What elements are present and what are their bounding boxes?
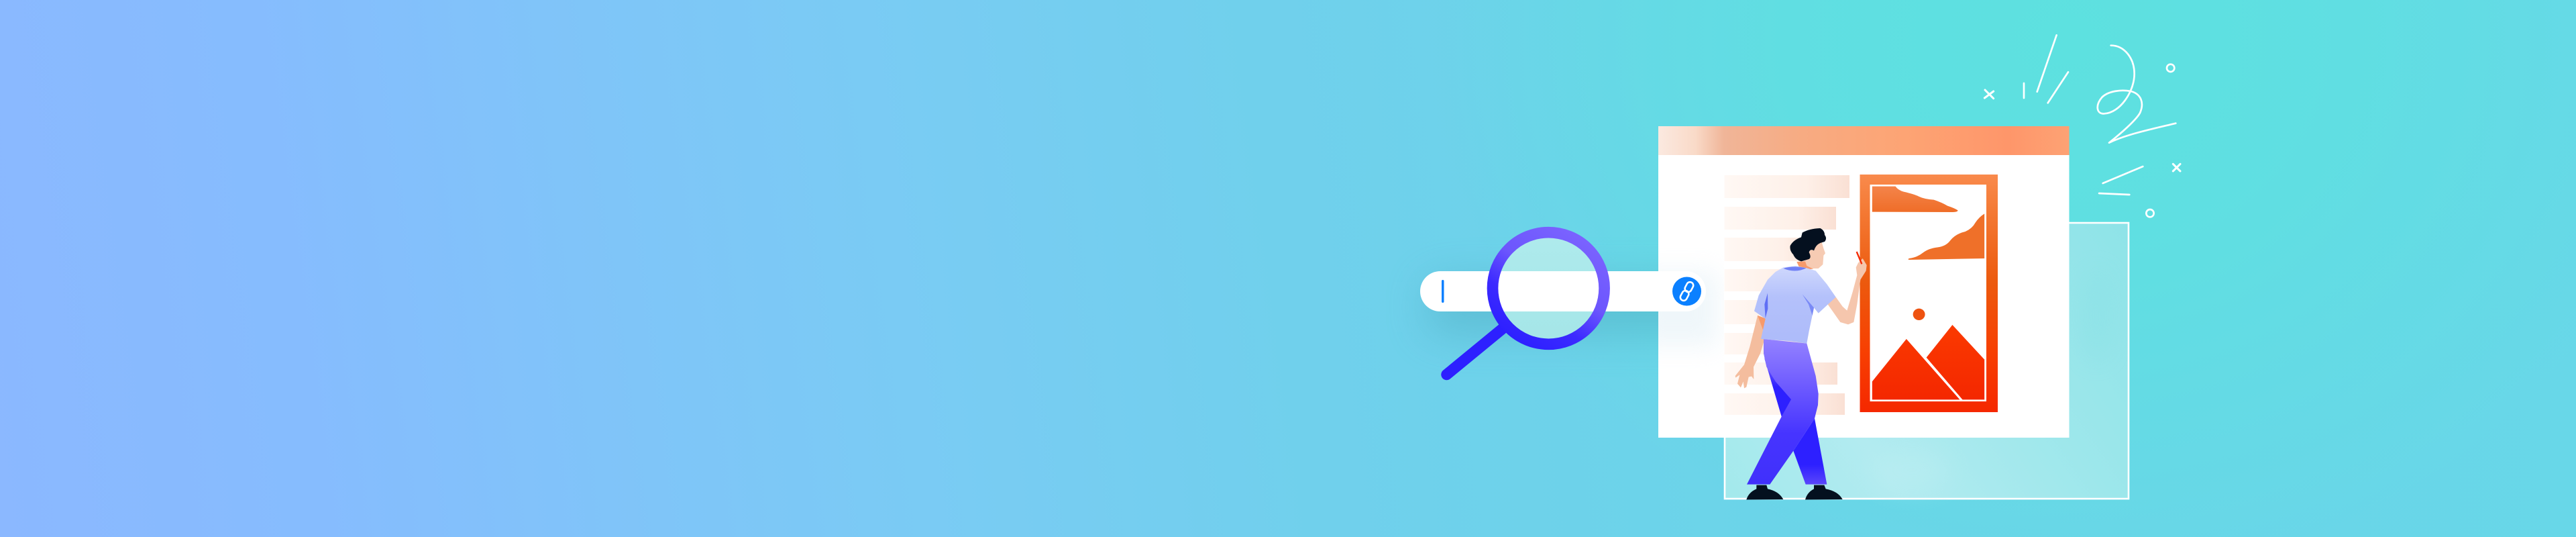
curly scribble xyxy=(2098,46,2176,143)
panel: browser window xyxy=(1658,126,2069,438)
sun xyxy=(1913,309,1925,320)
face xyxy=(1805,242,1825,268)
window body xyxy=(1658,126,2069,438)
back thigh shadow xyxy=(1764,358,1792,418)
decorative sketch marks xyxy=(1984,35,2180,217)
search bar xyxy=(1420,271,1706,311)
raised arm and hand xyxy=(1827,258,1867,324)
front leg and hips xyxy=(1747,339,1819,485)
panel: teal watercolor square behind window xyxy=(1725,223,2129,499)
icon: magnifying glass xyxy=(1446,232,1605,375)
neck xyxy=(1796,260,1813,270)
shirt xyxy=(1754,266,1836,344)
shirt fold: left xyxy=(1764,293,1768,318)
back arm and hand xyxy=(1735,315,1766,388)
mountain: front xyxy=(1872,339,1960,399)
icon: link xyxy=(1672,277,1701,306)
cross marks xyxy=(1984,90,2180,171)
cloud: top xyxy=(1872,187,1958,212)
window header bar xyxy=(1658,126,2069,155)
magnifier handle xyxy=(1446,327,1505,375)
shirt collar xyxy=(1783,266,1807,271)
illustration scene xyxy=(1420,34,2182,499)
text placeholder bars xyxy=(1724,175,1849,415)
faint speckled glow on window xyxy=(1658,273,1717,345)
person walking xyxy=(1735,228,1867,499)
shirt fold: right xyxy=(1803,294,1814,315)
inner sleeve xyxy=(1758,315,1766,332)
shoe: right xyxy=(1805,485,1843,499)
cloud: right xyxy=(1908,213,1984,260)
burst lines xyxy=(2024,35,2068,103)
magnifier ring xyxy=(1493,232,1605,344)
image frame xyxy=(1860,175,1998,412)
search bar shadow xyxy=(1429,282,1711,332)
lens tint above bar xyxy=(1501,238,1596,271)
dash lines xyxy=(2099,166,2143,195)
text cursor xyxy=(1442,280,1444,303)
small circles xyxy=(2146,64,2174,217)
mountain: back xyxy=(1927,325,1984,399)
lens tint below bar xyxy=(1504,311,1593,339)
back leg xyxy=(1793,418,1827,485)
image artwork xyxy=(1872,187,1984,399)
shoe: left xyxy=(1746,485,1783,499)
pencil xyxy=(1857,252,1862,264)
hair xyxy=(1790,228,1826,261)
